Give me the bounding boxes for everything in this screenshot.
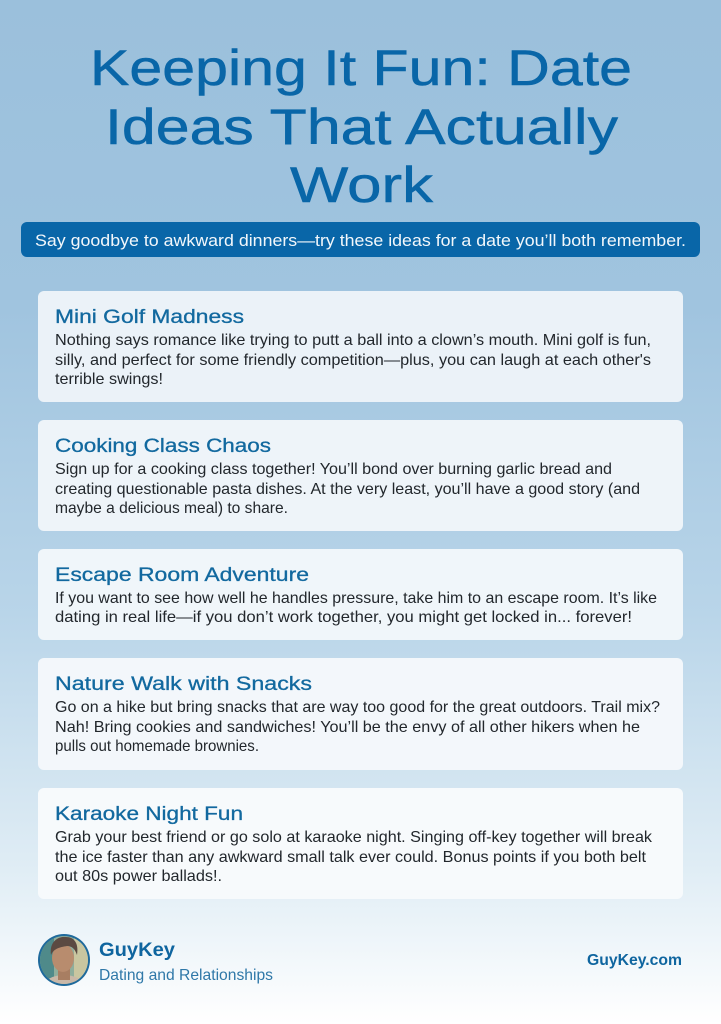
website: GuyKey.com: [587, 952, 682, 969]
panel: Karaoke Night Fun: out 80s power ballads!.: [55, 868, 222, 885]
panel: Karaoke Night Fun: Grab your best friend or go solo at karaoke night. Singing off-key together will break: [55, 829, 653, 846]
subtitle banner: [21, 222, 700, 257]
panel: Karaoke Night Fun: [38, 788, 683, 899]
panel: Karaoke Night Fun: the ice faster than any awkward small talk ever could. Bonus points if you both belt: [55, 849, 647, 866]
icon: author avatar: [38, 934, 90, 986]
subtitle banner: Say goodbye to awkward dinners—try these ideas for a date you’ll both remember.: [35, 231, 686, 250]
panel: Nature Walk with Snacks: Nature Walk with Snacks: [55, 674, 312, 695]
panel: Nature Walk with Snacks: pulls out homemade brownies.: [55, 738, 259, 755]
brand name: GuyKey: [99, 940, 175, 961]
panel: Escape Room Adventure: If you want to see how well he handles pressure, take him to an escape room. It’s like: [55, 590, 657, 607]
panel: Cooking Class Chaos: maybe a delicious meal) to share.: [55, 500, 288, 517]
panel: Cooking Class Chaos: Sign up for a cooking class together! You’ll bond over burning garlic bread and: [55, 461, 612, 478]
panel: Cooking Class Chaos: [38, 420, 683, 531]
title: Keeping It Fun: Date: [90, 40, 632, 96]
title: Ideas That Actually: [105, 99, 618, 155]
panel: Escape Room Adventure: [38, 549, 683, 640]
panel: Nature Walk with Snacks: Nah! Bring cookies and sandwiches! You’ll be the envy of all other hikers when he: [55, 719, 640, 736]
panel: Mini Golf Madness: [38, 291, 683, 402]
title: Work: [290, 157, 434, 213]
panel: Cooking Class Chaos: Cooking Class Chaos: [55, 436, 271, 457]
title: [90, 40, 632, 213]
panel: Karaoke Night Fun: Karaoke Night Fun: [55, 804, 243, 825]
panel: Mini Golf Madness: terrible swings!: [55, 371, 163, 388]
brand tagline: Dating and Relationships: [99, 967, 273, 984]
panel: Nature Walk with Snacks: [38, 658, 683, 770]
panel: Mini Golf Madness: Nothing says romance like trying to putt a ball into a clown’s mouth. Mini golf is fun,: [55, 332, 651, 349]
panel: Escape Room Adventure: Escape Room Adventure: [55, 565, 309, 586]
panel: Escape Room Adventure: dating in real life—if you don’t work together, you might get locked in... forever!: [55, 609, 632, 626]
panel: Nature Walk with Snacks: Go on a hike but bring snacks that are way too good for the great outdoors. Trail mix?: [55, 699, 660, 716]
panel: Mini Golf Madness: Mini Golf Madness: [55, 307, 244, 328]
panel: Cooking Class Chaos: creating questionable pasta dishes. At the very least, you’ll have a good story (and: [55, 481, 640, 498]
panel: Mini Golf Madness: silly, and perfect for some friendly competition—plus, you can laugh at each other's: [55, 352, 651, 369]
